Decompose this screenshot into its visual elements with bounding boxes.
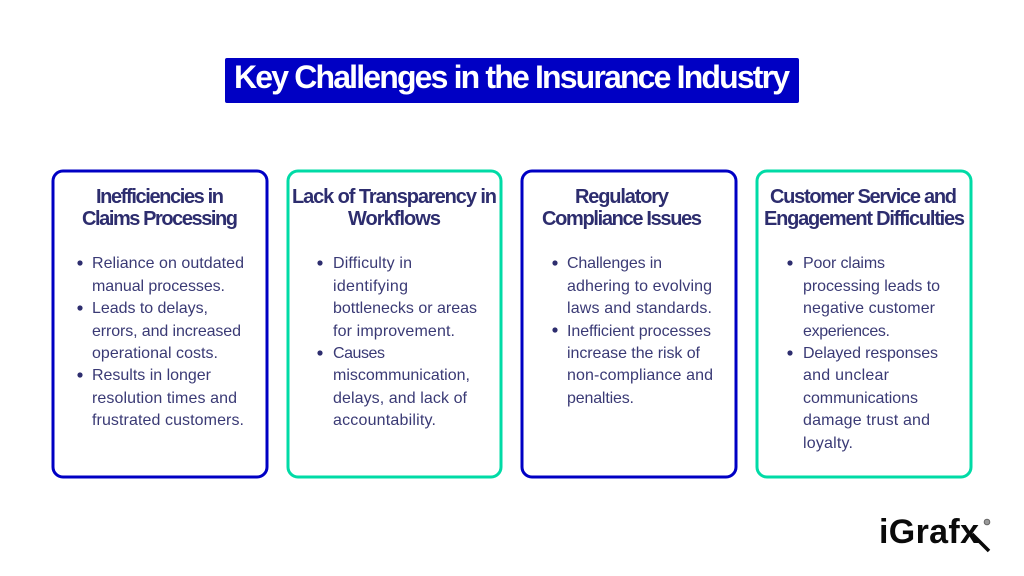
bullet list: claims processing: Results in longer <box>92 367 212 384</box>
heading: customer service: Engagement Difficulties <box>764 208 965 230</box>
bullet list: transparency: delays, and lack of <box>333 390 468 407</box>
panel: inefficiencies in claims processing <box>53 171 267 477</box>
bullet list: customer service: Delayed responses <box>803 345 938 362</box>
bullet list: transparency <box>317 255 477 429</box>
bullet list: transparency: bottlenecks or areas <box>333 300 477 317</box>
panel: regulatory compliance issues <box>522 171 736 477</box>
bullet list: compliance: adhering to evolving <box>567 278 712 295</box>
bullet list: customer service: negative customer <box>803 300 936 317</box>
bullet list: customer service: Poor claims <box>803 255 885 272</box>
bullet list: compliance: laws and standards. <box>567 300 712 317</box>
heading: transparency: Lack of Transparency in <box>292 186 497 208</box>
bullet list: compliance: increase the risk of <box>567 345 701 362</box>
heading: claims processing: Claims Processing <box>82 208 238 230</box>
heading: transparency: Workflows <box>348 208 441 230</box>
bullet list: compliance: penalties. <box>567 390 634 407</box>
heading: customer service <box>764 186 965 230</box>
bullet list: compliance <box>552 255 713 407</box>
bullet list: compliance: Inefficient processes <box>567 323 711 340</box>
bullet list: customer service: loyalty. <box>803 435 853 452</box>
logo: iGrafx: iGrafx <box>879 513 979 551</box>
bullet list: claims processing: frustrated customers. <box>92 412 244 429</box>
bullet list: transparency: for improvement. <box>333 323 455 340</box>
bullet list: compliance: non-compliance and <box>567 367 713 384</box>
bullet list: transparency: identifying <box>333 278 408 295</box>
bullet list: customer service: processing leads to <box>803 278 940 295</box>
bullet list: compliance: Challenges in <box>567 255 662 272</box>
bullet list: transparency: accountability. <box>333 412 436 429</box>
panel: customer service and engagement difficulties <box>757 171 971 477</box>
heading: customer service: Customer Service and <box>770 186 957 208</box>
title: Key Challenges in the Insurance Industry <box>234 59 790 95</box>
heading: compliance: Compliance Issues <box>542 208 702 230</box>
bullet list: customer service <box>787 255 940 452</box>
heading: compliance: Regulatory <box>575 186 670 208</box>
bullet list: transparency: Difficulty in <box>333 255 412 272</box>
bullet list: transparency: Causes <box>333 345 385 362</box>
bullet list: claims processing: errors, and increased <box>92 323 241 340</box>
panel: lack of transparency in workflows <box>288 171 501 477</box>
bullet list: claims processing: operational costs. <box>92 345 218 362</box>
bullet list: transparency: miscommunication, <box>333 367 470 384</box>
bullet list: customer service: damage trust and <box>803 412 930 429</box>
heading: compliance <box>542 186 702 230</box>
bullet list: customer service: and unclear <box>803 367 890 384</box>
bullet list: claims processing <box>77 255 244 429</box>
bullet list: claims processing: Leads to delays, <box>92 300 208 317</box>
bullet list: claims processing: resolution times and <box>92 390 237 407</box>
heading: transparency <box>292 186 497 230</box>
bullet list: claims processing: Reliance on outdated <box>92 255 244 272</box>
bullet list: customer service: experiences. <box>803 323 890 340</box>
bullet list: claims processing: manual processes. <box>92 278 225 295</box>
bullet list: customer service: communications <box>803 390 918 407</box>
heading: claims processing: Inefficiencies in <box>96 186 224 208</box>
heading: claims processing <box>82 186 238 230</box>
